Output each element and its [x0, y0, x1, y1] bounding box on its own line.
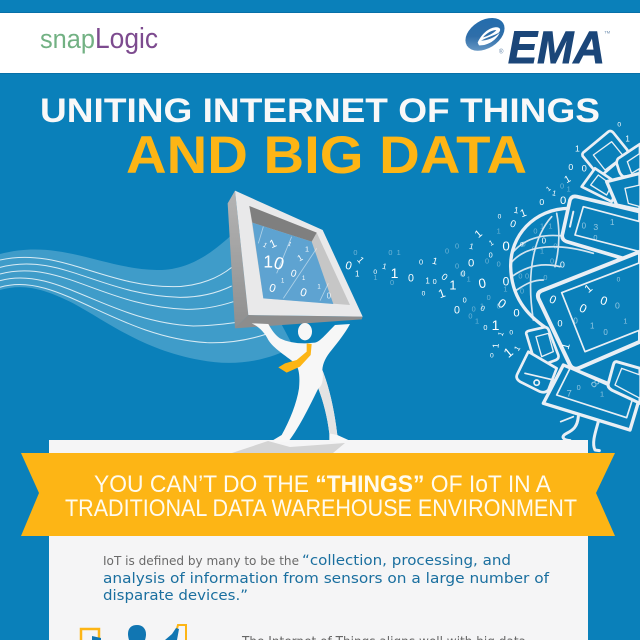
faint digits behind devices: 1 — [503, 285, 507, 294]
digits over the stream and devices: 1 — [473, 228, 485, 241]
digits over the stream and devices: 1 — [436, 286, 448, 301]
digits over the stream and devices — [344, 122, 630, 399]
faint digits behind devices: 0 — [532, 245, 536, 254]
monitor — [228, 191, 363, 328]
title — [40, 92, 600, 185]
figure shadow — [232, 441, 345, 453]
digits over the stream and devices: 1 — [512, 344, 523, 353]
digits over the stream and devices: 0 — [593, 233, 597, 242]
digits over the stream and devices: 1 — [487, 238, 495, 248]
digits over the stream and devices: 0 — [477, 275, 487, 291]
device: phone top — [582, 131, 628, 176]
devices — [517, 131, 640, 430]
monitor: 0 — [289, 268, 298, 280]
globe with device cluster — [344, 122, 640, 451]
digits over the stream and devices: 1 — [560, 342, 573, 351]
faint digits behind devices: 0 — [497, 260, 501, 269]
man lifting the monitor — [252, 323, 350, 443]
digits over the stream and devices: 0 — [503, 275, 510, 289]
digits over the stream and devices: 0 — [568, 162, 573, 172]
digits over the stream and devices: 0 — [573, 316, 578, 325]
main content panel — [49, 440, 588, 640]
faint digits behind devices: 0 — [533, 226, 537, 235]
faint digits behind devices: 0 — [455, 241, 459, 250]
faint digits behind devices: 1 — [567, 185, 571, 194]
faint digits behind devices: 0 — [497, 301, 501, 310]
logo: SnapLogic — [40, 23, 158, 55]
faint digits behind devices: 0 — [553, 241, 557, 250]
digits over the stream and devices: 0 — [495, 296, 509, 311]
digits over the stream and devices: 0 — [603, 328, 608, 337]
monitor: 1 — [286, 241, 293, 249]
logo: EMA: EMA — [508, 22, 605, 73]
faint digits behind devices: 1 — [548, 221, 552, 230]
digits over the stream and devices: 7 — [567, 389, 572, 399]
logo: SnapLogic: snap — [40, 24, 95, 54]
digits over the stream and devices: 1 — [425, 276, 430, 285]
digits over the stream and devices: 0 — [483, 323, 487, 332]
faint digits behind devices: 0 — [518, 271, 522, 280]
digits over the stream and devices: 0 — [547, 294, 558, 307]
monitor: 1 — [302, 276, 306, 282]
faint digits behind devices: 1 — [540, 246, 544, 255]
digits over the stream and devices: 0 — [598, 293, 610, 309]
title: UNITING INTERNET OF THINGS — [40, 92, 600, 130]
digits over the stream and devices: 1 — [610, 218, 615, 227]
digits over the stream and devices: 1 — [590, 321, 595, 330]
faint digits behind devices: 0 — [525, 271, 529, 280]
monitor: 0 — [327, 291, 332, 300]
monitor: 1 — [305, 245, 309, 254]
device: large tablet bottom — [543, 365, 640, 430]
digits over the stream and devices: 1 — [496, 330, 506, 337]
device: tablet behind — [582, 168, 620, 202]
digits over the stream and devices: 1 — [431, 256, 439, 267]
logo: EMA: ® — [499, 48, 504, 55]
digits over the stream and devices: 0 — [463, 296, 467, 305]
digits over the stream and devices: 8 — [588, 376, 603, 391]
digits over the stream and devices: 0 — [577, 301, 589, 316]
definition paragraph: “collection, processing, and — [302, 553, 511, 569]
banner ribbon — [21, 453, 615, 536]
digits over the stream and devices: 0 — [454, 304, 460, 316]
definition paragraph: disparate devices.” — [103, 588, 248, 604]
digits over the stream and devices: 1 — [551, 188, 557, 198]
digits over the stream and devices: 1 — [355, 270, 360, 279]
faint digits behind devices: 0 — [543, 273, 547, 282]
faint digits behind devices: 1 — [397, 248, 401, 257]
faint digits behind devices: 0 — [388, 248, 392, 257]
digits over the stream and devices: 0 — [617, 277, 621, 284]
faint digits behind devices: 0 — [487, 293, 491, 302]
globe — [511, 208, 593, 328]
faint digits behind devices: 0 — [445, 246, 449, 255]
digits over the stream and devices: 0 — [508, 218, 518, 231]
faint digits behind devices: 0 — [390, 278, 394, 287]
logo: EMA — [459, 11, 610, 73]
faint digits behind devices: 0 — [460, 270, 464, 279]
digits over the stream and devices: 1 — [625, 135, 630, 144]
digits over the stream and devices: 1 — [600, 390, 604, 399]
digits over the stream and devices: 0 — [582, 164, 587, 174]
digits over the stream and devices: 1 — [545, 185, 553, 193]
faint digits behind devices: 0 — [468, 311, 472, 320]
digits over the stream and devices: 0 — [468, 258, 474, 270]
digits over the stream and devices: 1 — [519, 207, 528, 220]
digits over the stream and devices: 1 — [501, 344, 516, 361]
digits over the stream and devices: 1 — [563, 173, 573, 186]
digits over the stream and devices: 0 — [479, 303, 486, 313]
digits over the stream and devices: 0 — [520, 242, 524, 249]
digits over the stream and devices: 1 — [381, 262, 388, 272]
faint digits behind devices: 0 — [472, 305, 476, 314]
faint digits behind devices: 1 — [467, 275, 471, 284]
faint digits behind devices: 1 — [373, 273, 377, 282]
digits over the stream and devices: 1 — [355, 255, 366, 265]
digits over the stream and devices: 0 — [577, 383, 581, 392]
digits over the stream and devices: 0 — [560, 195, 566, 207]
digits over the stream and devices: 3 — [593, 222, 598, 232]
device: large tablet upper — [562, 196, 640, 263]
legs — [561, 417, 599, 451]
digits over the stream and devices: 1 — [583, 282, 595, 296]
faint digits behind devices: 1 — [497, 226, 501, 235]
faint digits behind devices: 0 — [455, 261, 459, 270]
digits over the stream and devices: 0 — [557, 319, 563, 329]
digits over the stream and devices: 1 — [513, 205, 520, 216]
digits over the stream and devices: 0 — [617, 122, 621, 129]
digits over the stream and devices: 1 — [391, 265, 399, 281]
monitor: 0 — [298, 286, 308, 300]
faint digits behind devices: 0 — [485, 256, 489, 265]
digits over the stream and devices: 0 — [408, 272, 414, 284]
digits over the stream and devices: 0 — [615, 300, 620, 310]
monitor: 1 — [295, 252, 305, 263]
device: phone top right — [617, 144, 640, 177]
monitor: 1 — [268, 238, 279, 251]
digits over the stream and devices: 0 — [440, 271, 450, 283]
digits over the stream and devices: 0 — [433, 277, 437, 286]
faint digits behind devices: 1 — [475, 316, 479, 325]
device: phone lower left — [517, 352, 557, 392]
definition paragraph — [103, 553, 550, 604]
monitor: 1 — [317, 285, 321, 291]
digits over the stream and devices: 0 — [490, 352, 494, 359]
faint digits behind devices: 1 — [480, 301, 484, 310]
banner text: YOU CAN’T DO THE “THINGS” OF IoT IN A — [94, 471, 551, 498]
digits over the stream and devices: 0 — [419, 258, 423, 267]
faint digits behind devices: 1 — [540, 221, 544, 230]
device: tablet upper right — [607, 173, 640, 210]
header band — [0, 12, 640, 74]
monitor: 1 — [261, 242, 268, 250]
digits over the stream and devices: 0 — [373, 269, 377, 276]
faint digits behind devices: 0 — [353, 248, 357, 257]
digits over the stream and devices: 0 — [560, 259, 565, 269]
digits over the stream and devices: 0 — [542, 236, 547, 245]
digits over the stream and devices: 0 — [582, 221, 587, 230]
digits over the stream and devices: 0 — [422, 290, 426, 297]
faint digits behind devices — [353, 181, 571, 325]
title: AND BIG DATA — [126, 126, 527, 185]
logo: EMA: TM — [604, 29, 610, 34]
digits over the stream and devices: 1 — [623, 316, 627, 325]
monitor: 1 — [281, 278, 285, 284]
digits over the stream and devices: 0 — [509, 329, 513, 336]
digits over the stream and devices: 1 — [490, 343, 501, 349]
digits over the stream and devices: 0 — [344, 260, 353, 273]
faint digits behind devices: 0 — [560, 181, 564, 190]
digits over the stream and devices: 0 — [461, 270, 466, 279]
digits over the stream and devices: 1 — [468, 242, 475, 252]
faint digits behind devices: 0 — [520, 286, 524, 295]
icons row — [81, 625, 186, 640]
monitor: 0 — [267, 282, 277, 295]
monitor: 1 — [263, 251, 273, 271]
data wave streaming into monitor — [0, 233, 293, 363]
digits over the stream and devices: 0 — [502, 239, 510, 254]
logo: SnapLogic: Logic — [95, 23, 158, 55]
banner text: TRADITIONAL DATA WAREHOUSE ENVIRONMENT — [65, 495, 577, 522]
digits over the stream and devices: 0 — [539, 197, 544, 207]
monitor: 0 — [271, 252, 287, 274]
digits over the stream and devices: 1 — [492, 317, 500, 333]
device: small phone lower left — [526, 327, 559, 366]
banner text — [65, 471, 577, 522]
definition paragraph: analysis of information from sensors on a large number of — [103, 571, 550, 587]
definition paragraph: IoT is defined by many to be the — [103, 554, 299, 568]
digits over the stream and devices: 1 — [575, 144, 580, 154]
device: large tablet centre — [538, 252, 640, 369]
digits over the stream and devices: 0 — [489, 250, 493, 259]
digits over the stream and devices: 1 — [449, 278, 456, 292]
faint digits behind devices: 0 — [522, 240, 526, 249]
faint digits behind devices: 0 — [550, 256, 554, 265]
digits over the stream and devices: 0 — [513, 308, 520, 320]
digits over the stream and devices: 0 — [498, 214, 502, 221]
device: phone right — [608, 362, 640, 403]
